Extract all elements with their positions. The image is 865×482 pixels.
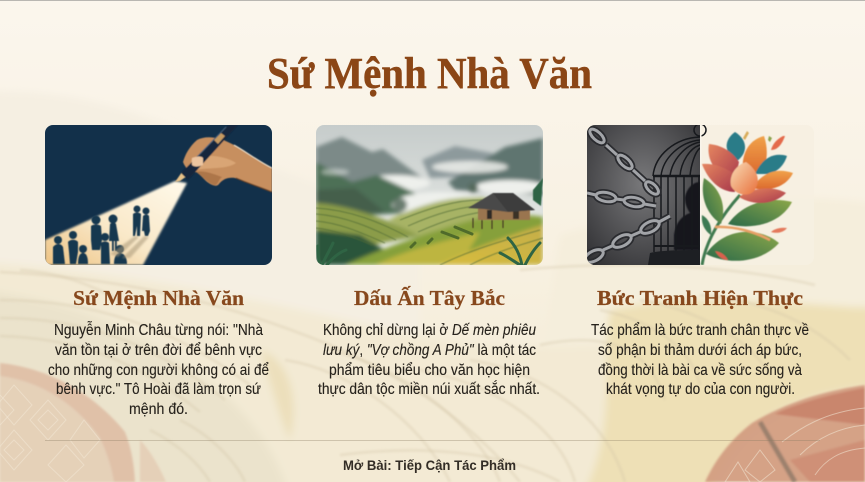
cage xyxy=(653,124,706,252)
body text: lưu ký, "Vợ chồng A Phủ" là một tác xyxy=(323,342,536,359)
top edge line xyxy=(0,0,865,1)
body text: văn tồn tại ở trên đời để bênh vực xyxy=(55,342,262,359)
illustration: chained cage and blooming flower xyxy=(587,125,794,265)
body text xyxy=(48,322,269,418)
footer label: Mở Bài: Tiếp Cận Tác Phẩm xyxy=(343,457,516,473)
body text: đồng thời là bài ca về sức sống và xyxy=(598,362,802,379)
chains xyxy=(583,127,670,265)
body text: Nguyễn Minh Châu từng nói: "Nhà xyxy=(54,322,263,339)
heading: Bức Tranh Hiện Thực xyxy=(597,286,803,310)
body text: thực dân tộc miền núi xuất sắc nhất. xyxy=(318,381,540,398)
body text: bênh vực." Tô Hoài đã làm trọn sứ xyxy=(56,381,261,398)
silhouettes xyxy=(53,206,150,264)
heading: Dấu Ấn Tây Bắc xyxy=(354,286,505,310)
hand xyxy=(175,125,272,192)
body text xyxy=(318,322,540,398)
body text: khát vọng tự do của con người. xyxy=(606,381,795,398)
prisoner silhouette xyxy=(674,182,700,250)
illustration: pen casting a light on people xyxy=(45,125,272,265)
body text: Tác phẩm là bức tranh chân thực về xyxy=(591,322,809,339)
flower xyxy=(702,131,793,265)
body text: cho những con người không có ai để xyxy=(48,362,269,379)
body text: số phận bi thảm dưới ách áp bức, xyxy=(598,342,802,359)
body text: phẩm tiêu biểu cho văn học hiện xyxy=(329,362,530,379)
panel: writer's mission xyxy=(45,125,272,418)
title: Sứ Mệnh Nhà Văn xyxy=(267,49,592,98)
panel: realist portrait xyxy=(583,124,814,398)
heading: Sứ Mệnh Nhà Văn xyxy=(73,286,244,310)
hut xyxy=(468,178,543,229)
body text: Không chỉ dừng lại ở Dế mèn phiêu xyxy=(323,322,536,339)
body text: mệnh đó. xyxy=(129,401,188,418)
panel: Northwest imprint xyxy=(316,125,545,398)
illustration: misty mountains and terraces xyxy=(316,125,545,265)
body text xyxy=(591,322,809,398)
